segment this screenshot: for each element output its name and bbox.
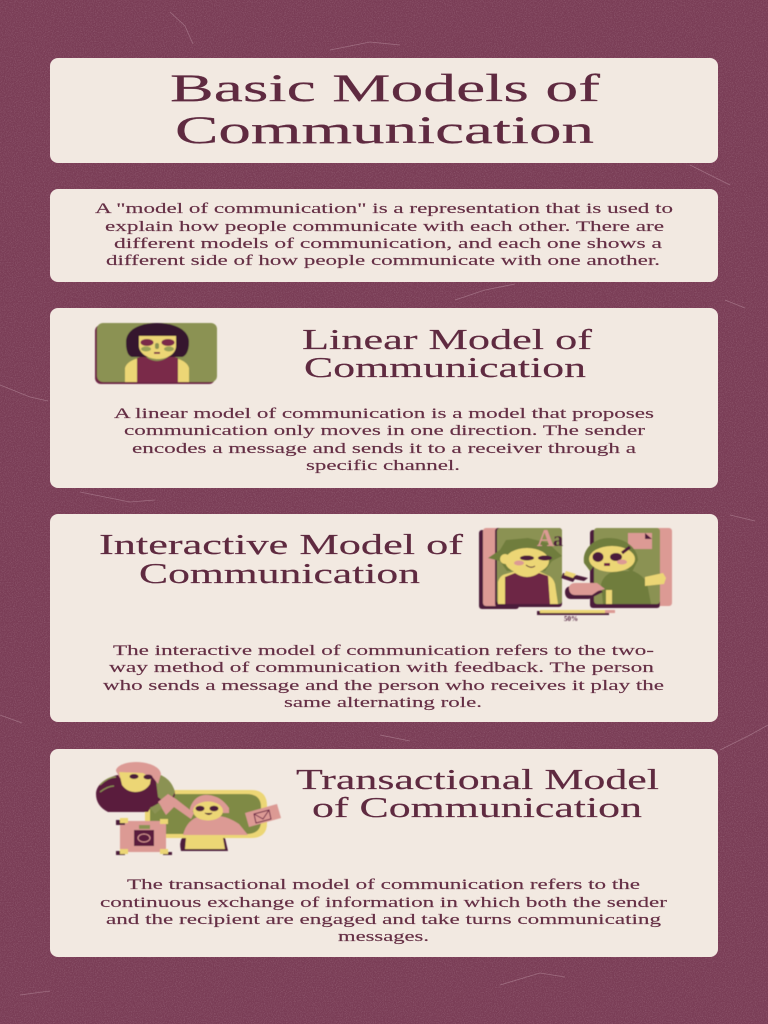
icon: envelope	[245, 804, 281, 827]
heading: linear model: Linear Model of	[302, 324, 593, 356]
linear model text: communication only moves in one direction. The sender	[124, 423, 645, 439]
heading: transactional model: Transactional Model	[296, 764, 659, 796]
linear model text: A linear model of communication is a model that proposes	[114, 406, 655, 422]
panel: introduction	[50, 189, 718, 282]
intro text: A "model of communication" is a representation that is used to	[95, 201, 673, 217]
linear model text: specific channel.	[306, 458, 460, 474]
heading: linear model: Communication	[304, 352, 587, 384]
Aa letters: a	[553, 529, 563, 551]
linear model text: encodes a message and sends it to a receiver through a	[132, 441, 637, 457]
transactional model text: continuous exchange of information in which both the sender	[100, 895, 667, 911]
transactional model text: messages.	[338, 929, 429, 945]
heading: linear model	[302, 324, 593, 384]
icon: woman portrait	[95, 323, 217, 384]
progress bar: 50%	[564, 615, 578, 623]
panel: linear model	[50, 308, 718, 488]
panel: transactional model	[50, 749, 718, 957]
interactive model text: way method of communication with feedback. The person	[109, 660, 655, 676]
transactional model text: and the recipient are engaged and take turns communicating	[106, 912, 661, 928]
linear model text	[114, 406, 655, 474]
transactional model text	[100, 877, 667, 945]
intro text	[95, 201, 673, 269]
heading: transactional model	[296, 764, 659, 824]
heading: interactive model: Communication	[139, 558, 421, 590]
interactive model text	[103, 643, 664, 711]
intro text: explain how people communicate with each other. There are	[105, 219, 664, 235]
icon: media box	[116, 818, 172, 855]
intro text: different models of communication, and each one shows a	[114, 236, 663, 252]
title: Basic Models of	[170, 67, 600, 110]
speech bubble	[565, 586, 603, 599]
icon: two people on phones	[479, 526, 672, 623]
panel: interactive model	[50, 514, 718, 722]
heading: interactive model: Interactive Model of	[99, 529, 464, 561]
heading: transactional model: of Communication	[312, 792, 643, 824]
Aa letters	[537, 526, 563, 552]
interactive model text: same alternating role.	[284, 695, 482, 711]
interactive model text: who sends a message and the person who receives it play the	[103, 678, 664, 694]
icon: people with monitor	[96, 762, 281, 855]
heading: interactive model	[99, 529, 464, 590]
intro text: different side of how people communicate with one another.	[106, 253, 660, 269]
title: Communication	[175, 109, 594, 152]
title	[170, 67, 600, 152]
transactional model text: The transactional model of communication refers to the	[127, 877, 640, 893]
panel: title	[50, 58, 718, 163]
progress bar	[537, 610, 615, 623]
interactive model text: The interactive model of communication refers to the two-	[113, 643, 654, 659]
Aa letters: A	[537, 526, 555, 552]
